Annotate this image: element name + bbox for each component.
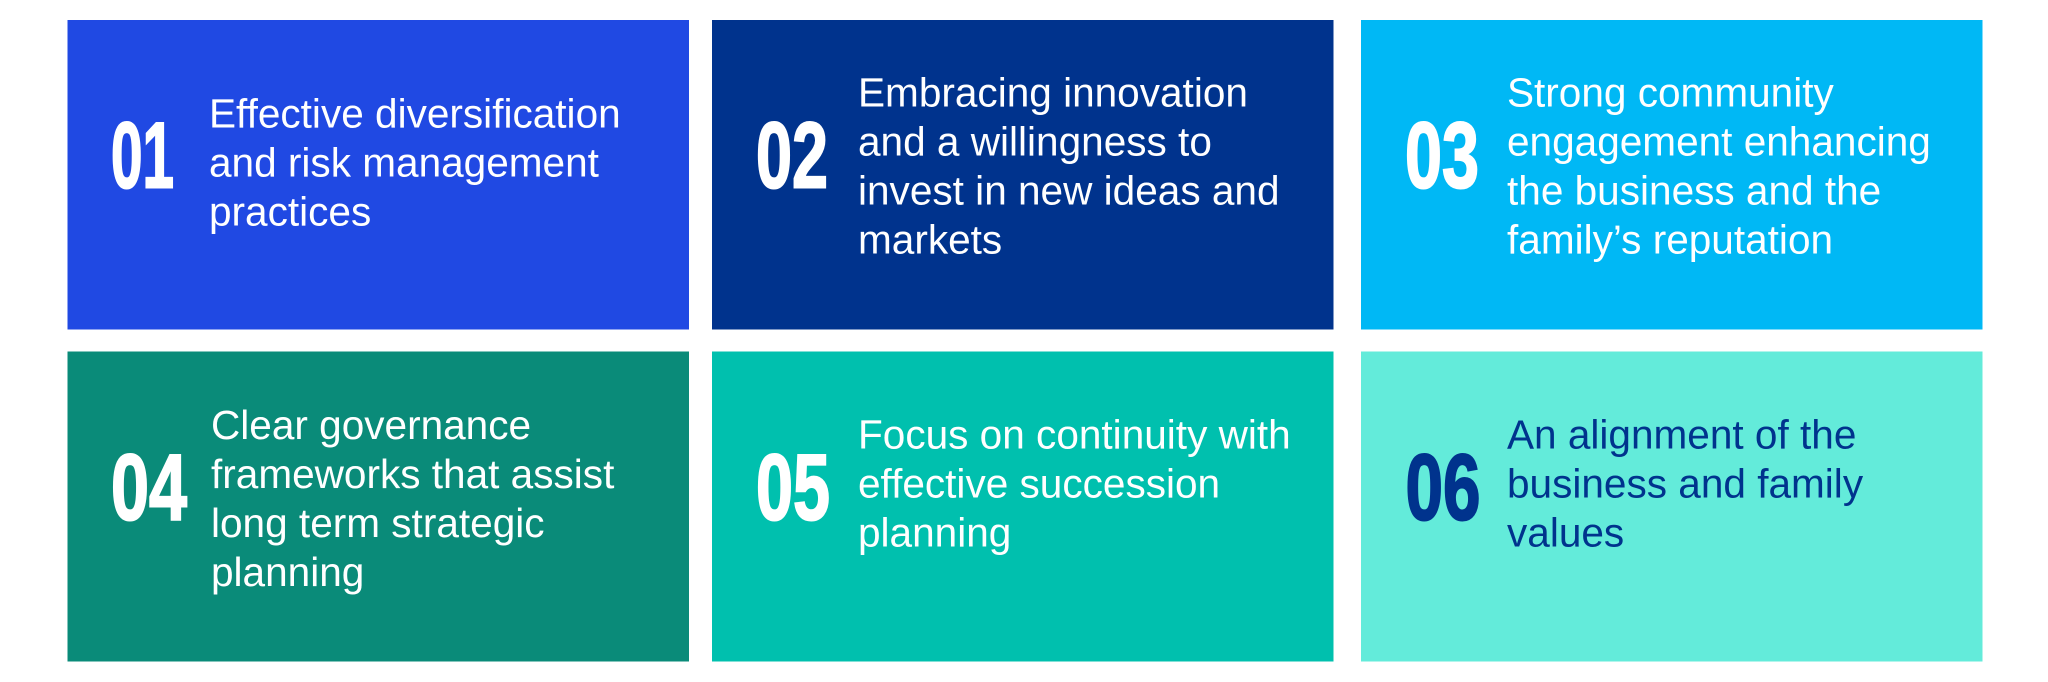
text: focus on continuity: effective succession [858, 460, 1220, 506]
number 03: 03 [1405, 102, 1479, 208]
text: clear governance frameworks: long term strategic [211, 500, 545, 546]
number 05: 05 [756, 434, 830, 540]
text: strong community engagement: family’s reputation [1507, 216, 1833, 262]
number 04: 04 [111, 434, 187, 540]
text: embracing innovation: markets [858, 216, 1002, 262]
text: focus on continuity: planning [858, 510, 1011, 556]
text: embracing innovation: and a willingness to [858, 118, 1212, 164]
panel: 01 diversification [68, 20, 689, 330]
text: clear governance frameworks: planning [211, 549, 364, 595]
panel: 02 innovation [712, 20, 1334, 330]
text: clear governance frameworks: frameworks that assist [211, 451, 614, 497]
text: focus on continuity: Focus on continuity with [858, 412, 1291, 458]
panel: 05 continuity [712, 352, 1334, 662]
text: diversification and risk management: practices [209, 188, 371, 234]
text: embracing innovation: invest in new ideas and [858, 168, 1280, 214]
text: clear governance frameworks: Clear governance [211, 402, 531, 448]
text: alignment of values: An alignment of the [1507, 412, 1856, 458]
panel: 04 governance [68, 352, 689, 662]
text: alignment of values: business and family [1507, 460, 1864, 506]
number 01: 01 [111, 102, 174, 208]
text: strong community engagement: engagement enhancing [1507, 118, 1931, 164]
text: strong community engagement: Strong community [1507, 70, 1834, 116]
text: alignment of values: values [1507, 510, 1624, 556]
number 02: 02 [756, 102, 828, 208]
panel: 06 values alignment [1361, 352, 1982, 662]
number 06: 06 [1406, 434, 1480, 540]
text: embracing innovation: Embracing innovation [858, 70, 1248, 116]
text: strong community engagement: the business and the [1507, 168, 1881, 214]
text: diversification and risk management: Effective diversification [209, 90, 621, 136]
text: diversification and risk management: and risk management [209, 140, 599, 186]
panel: 03 community engagement [1361, 20, 1982, 330]
